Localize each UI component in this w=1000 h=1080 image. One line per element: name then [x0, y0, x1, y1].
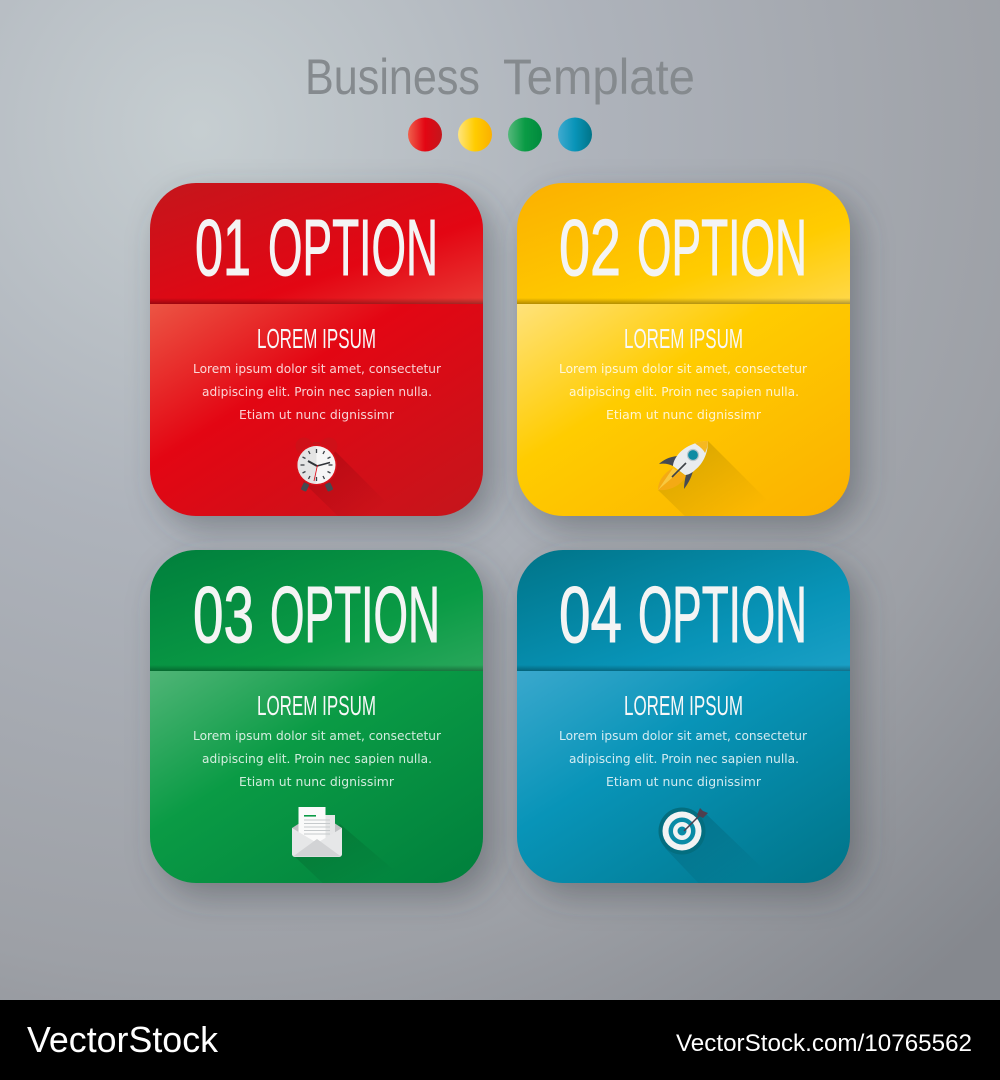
header band [517, 550, 850, 671]
body text: Etiam ut nunc dignissimr [239, 775, 394, 789]
colour dots [408, 118, 592, 152]
body text: adipiscing elit. Proin nec sapien nulla. [202, 385, 432, 399]
footer bar [0, 1000, 1000, 1080]
subheading: LOREM IPSUM [624, 690, 743, 721]
body text: Lorem ipsum dolor sit amet, consectetur [193, 362, 441, 376]
icon: alarm clock [296, 438, 338, 492]
heading: 03 [193, 570, 254, 659]
lower section [517, 304, 850, 516]
long shadow [658, 441, 752, 516]
icon: envelope [292, 807, 342, 857]
heading [193, 570, 440, 659]
body text: adipiscing elit. Proin nec sapien nulla. [569, 752, 799, 766]
body text: Lorem ipsum dolor sit amet, consectetur [559, 729, 807, 743]
title [305, 49, 695, 105]
header band [150, 550, 483, 671]
title: Template [503, 49, 695, 105]
logo: VectorStock: VectorStock [27, 1019, 219, 1060]
panel: 03 option [150, 550, 493, 895]
body text [193, 729, 441, 789]
header band [517, 183, 850, 304]
heading [559, 570, 807, 659]
icon: target [658, 808, 708, 854]
body text [193, 362, 441, 422]
panel: 04 option [517, 550, 860, 895]
body text: adipiscing elit. Proin nec sapien nulla. [569, 385, 799, 399]
header band [150, 183, 483, 304]
body text [559, 729, 807, 789]
image id url: VectorStock.com/10765562 [676, 1030, 972, 1057]
subheading: LOREM IPSUM [257, 690, 376, 721]
subheading: LOREM IPSUM [257, 323, 376, 354]
heading: OPTION [270, 570, 440, 659]
heading: OPTION [638, 570, 807, 659]
title: Business [305, 49, 480, 105]
body text [559, 362, 807, 422]
body text: Etiam ut nunc dignissimr [606, 775, 761, 789]
long shadow [296, 824, 370, 878]
lower section [150, 671, 483, 883]
body text: Lorem ipsum dolor sit amet, consectetur [193, 729, 441, 743]
long shadow [303, 452, 372, 514]
heading: 02 [559, 203, 621, 292]
body text: Etiam ut nunc dignissimr [606, 408, 761, 422]
body text: adipiscing elit. Proin nec sapien nulla. [202, 752, 432, 766]
long shadow [665, 814, 739, 877]
subheading: LOREM IPSUM [624, 323, 743, 354]
icon: rocket [658, 441, 708, 490]
heading: OPTION [268, 203, 438, 292]
heading: 04 [559, 570, 622, 659]
heading: OPTION [637, 203, 807, 292]
body text: Etiam ut nunc dignissimr [239, 408, 394, 422]
panel: 01 option [150, 183, 493, 528]
lower section [517, 671, 850, 883]
lower section [150, 304, 483, 516]
heading [559, 203, 807, 292]
panel: 02 option [517, 183, 860, 528]
heading: 01 [195, 203, 251, 292]
body text: Lorem ipsum dolor sit amet, consectetur [559, 362, 807, 376]
heading [195, 203, 438, 292]
